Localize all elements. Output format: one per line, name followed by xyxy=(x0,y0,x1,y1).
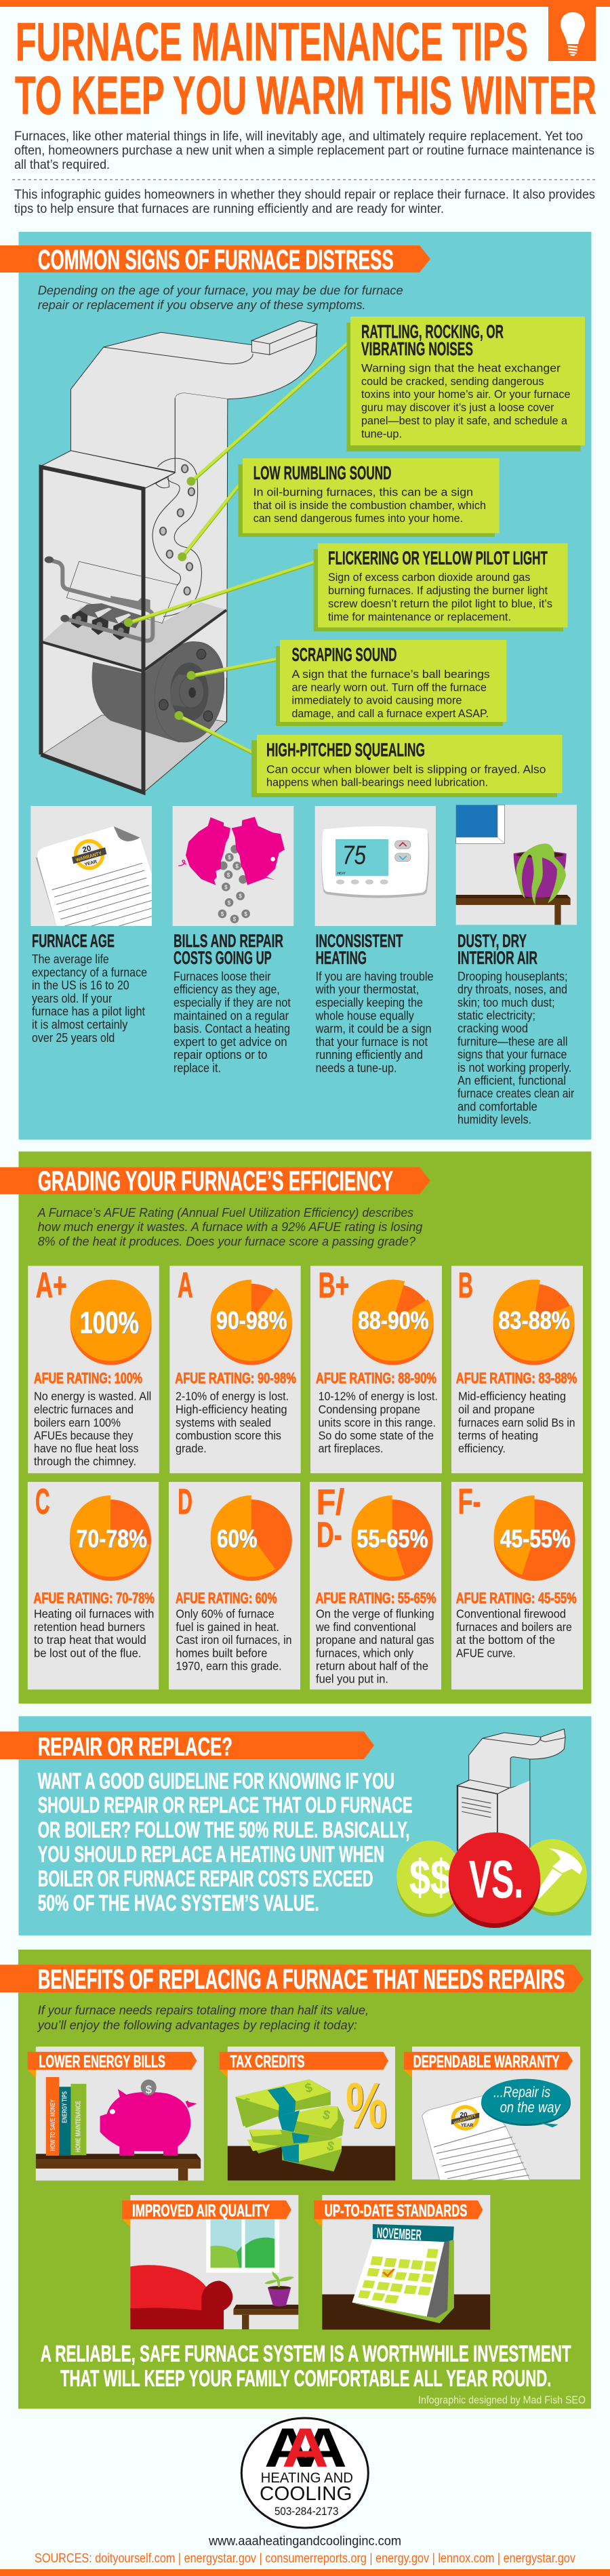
card text: furnace age: it is almost certainly xyxy=(32,1018,127,1032)
illustration: broken piggy bank with coins: $ xyxy=(244,911,247,917)
benefit card: tax credits: % xyxy=(346,2070,387,2142)
card text: bills and repair costs: efficiency as they age, xyxy=(174,983,280,997)
intro italic: grading: 8% of the heat it produces. Does your furnace score a passing grade? xyxy=(38,1234,416,1249)
grade card: C: to trap heat that would xyxy=(34,1633,146,1647)
grade card: C: C xyxy=(35,1482,50,1522)
illustration: thermostat: 75 xyxy=(342,841,366,870)
grade card: B+ xyxy=(310,1266,442,1473)
benefit card: dependable warranty: WARRANTY xyxy=(453,2114,476,2126)
grade card: D: Cast iron oil furnaces, in xyxy=(176,1633,291,1647)
grade card: F-: furnaces and boilers are xyxy=(456,1620,572,1634)
illustration: broken piggy bank with coins: $ xyxy=(228,900,231,906)
grade card: F/D-: On the verge of flunking xyxy=(316,1607,434,1621)
benefit card: tax credits xyxy=(220,2047,395,2181)
card text: inconsistent heating xyxy=(315,931,434,1074)
banner heading: common signs: COMMON SIGNS OF FURNACE DISTRESS xyxy=(38,244,394,275)
top orange bar xyxy=(0,0,610,7)
card text: dusty dry interior air: INTERIOR AIR xyxy=(458,948,537,968)
grade card: A: AFUE RATING: 90-98% xyxy=(175,1370,296,1387)
grade card: F-: 45-55% xyxy=(500,1525,571,1552)
intro text: often, homeowners purchase a new unit when a simple replacement part or routine furnace maintenance is xyxy=(14,144,594,158)
intro italic: benefits: If your furnace needs repairs totaling more than half its value, xyxy=(38,2003,369,2017)
grade card: A+: electric furnaces and xyxy=(34,1403,134,1416)
50% rule text: OR BOILER? FOLLOW THE 50% RULE. BASICALLY, xyxy=(38,1817,409,1842)
grade card: D: 1970, earn this grade. xyxy=(176,1659,282,1672)
mini banner: improved air quality: IMPROVED AIR QUALITY xyxy=(132,2201,270,2220)
intro text: tips to help ensure that furnaces are running efficiently and are ready for winter. xyxy=(14,202,444,216)
callout: rattling noises: tune-up. xyxy=(361,427,402,440)
50% rule text xyxy=(38,1768,412,1915)
card text: inconsistent heating: HEATING xyxy=(316,948,367,968)
callout: high-pitched squealing: happens when ball-bearings need lubrication. xyxy=(266,776,488,789)
grade card: F/D-: AFUE RATING: 55-65% xyxy=(316,1590,436,1607)
card text: furnace age: furnace has a pilot light xyxy=(32,1005,145,1018)
callout: high-pitched squealing: HIGH-PITCHED SQUEALING xyxy=(266,740,425,761)
mini banner: up-to-date standards: UP-TO-DATE STANDARDS xyxy=(325,2201,468,2220)
grade card: B: furnaces earn solid Bs in xyxy=(458,1415,575,1429)
grade card: F-: F- xyxy=(458,1482,481,1522)
50% rule text: SHOULD REPAIR OR REPLACE THAT OLD FURNACE xyxy=(38,1792,412,1817)
callout: flickering pilot light: time for maintenance or replacement. xyxy=(328,610,511,623)
grade card: C: 70-78% xyxy=(76,1525,147,1552)
grade card: F/D-: fuel you put in. xyxy=(316,1672,388,1686)
callout: scraping sound: immediately to avoid causing more xyxy=(291,694,462,706)
card text: inconsistent heating: whole house equally xyxy=(315,1009,414,1022)
callout: flickering pilot light: screw doesn’t return the pilot light to blue, it’s xyxy=(328,597,552,610)
callout: scraping sound: SCRAPING SOUND xyxy=(291,644,397,665)
panel: repair or replace xyxy=(0,1716,591,1935)
logo: AAA heating and cooling: A xyxy=(300,2417,347,2479)
intro italic: benefits: you’ll enjoy the following advantages by replacing it today: xyxy=(37,2017,357,2032)
grade card: B+: art fireplaces. xyxy=(319,1442,383,1455)
grade card: B: efficiency. xyxy=(458,1442,506,1455)
card text: inconsistent heating: If you are having trouble xyxy=(316,969,434,983)
intro italic: common signs xyxy=(38,283,403,312)
intro text: all that’s required. xyxy=(14,158,110,172)
card text: dusty dry interior air: is not working properly. xyxy=(458,1061,571,1074)
card text: dusty dry interior air: and comfortable xyxy=(458,1100,537,1113)
banner heading: common signs xyxy=(0,244,430,275)
grade card: B+: AFUE RATING: 88-90% xyxy=(316,1370,436,1387)
grade card: D: fuel is gained in heat. xyxy=(176,1620,279,1634)
benefit card: dependable warranty: ...Repair is xyxy=(493,2083,550,2100)
50% rule text: YOU SHOULD REPLACE A HEATING UNIT WHEN xyxy=(38,1841,384,1866)
intro italic: common signs: Depending on the age of your furnace, you may be due for furnace xyxy=(38,283,403,297)
mini banner: lower energy bills xyxy=(28,2052,197,2078)
grade card: A: High-efficiency heating xyxy=(176,1403,287,1416)
benefit card: dependable warranty xyxy=(404,2047,580,2183)
card text: dusty dry interior air: furniture—these are all xyxy=(458,1034,568,1048)
grade card: B+: units score in this range. xyxy=(319,1415,436,1429)
grade card: B: terms of heating xyxy=(458,1428,538,1442)
illustration: broken piggy bank with coins: $ xyxy=(224,884,228,890)
intro text xyxy=(12,129,596,216)
grade card: B+: Condensing propane xyxy=(319,1403,420,1416)
grade card: F/D-: D- xyxy=(317,1515,342,1555)
callout: rattling noises: toxins into your home’s air. Or your furnace xyxy=(361,388,571,401)
callout: rattling noises: Warning sign that the heat exchanger xyxy=(361,362,561,374)
logo: AAA heating and cooling: A xyxy=(282,2417,329,2479)
furnace illustration xyxy=(41,321,317,793)
benefit card: lower energy bills: $ xyxy=(146,2083,152,2096)
benefit card: lower energy bills: ENERGY TIPS xyxy=(61,2091,69,2123)
card text: bills and repair costs: COSTS GOING UP xyxy=(174,948,272,968)
mini banner: improved air quality xyxy=(122,2200,291,2227)
grade card: C: AFUE RATING: 70-78% xyxy=(33,1590,155,1607)
grade card: A+: boilers earn 100% xyxy=(34,1415,121,1429)
grade card: D xyxy=(169,1482,300,1689)
benefit card: improved air quality xyxy=(122,2195,298,2329)
mini banner: tax credits: TAX CREDITS xyxy=(230,2052,305,2071)
card text: dusty dry interior air: static electricity; xyxy=(458,1009,535,1022)
intro italic: grading: A Furnace’s AFUE Rating (Annual Fuel Utilization Efficiency) describes xyxy=(37,1205,413,1220)
callout: rattling noises: VIBRATING NOISES xyxy=(361,338,473,359)
grade card: A xyxy=(169,1266,301,1473)
card text: bills and repair costs xyxy=(174,931,291,1074)
card text: inconsistent heating: running efficiently and xyxy=(316,1048,423,1062)
grade card: B: B xyxy=(458,1266,473,1306)
callout: rattling noises: panel—best to play it safe, and schedule a xyxy=(361,414,568,427)
grade card: C: Heating oil furnaces with xyxy=(34,1607,154,1621)
grade card: B+: 10-12% of energy is lost. xyxy=(319,1390,438,1403)
intro italic: grading: how much energy it wastes. A furnace with a 92% AFUE rating is losing xyxy=(38,1220,423,1234)
mini banner: lower energy bills: LOWER ENERGY BILLS xyxy=(39,2052,165,2071)
grade card: F/D- xyxy=(310,1482,441,1689)
50% rule text: BOILER OR FURNACE REPAIR COSTS EXCEED xyxy=(38,1866,373,1891)
grade card: C xyxy=(28,1482,159,1689)
callout: high-pitched squealing xyxy=(251,735,563,797)
card text: dusty dry interior air: humidity levels. xyxy=(458,1113,531,1127)
illustration: broken piggy bank with coins: $ xyxy=(227,872,230,878)
card text: dusty dry interior air: dry throats, noses, and xyxy=(458,983,567,997)
grade card: A: A xyxy=(178,1266,193,1306)
callout: scraping sound: A sign that the furnace’s ball bearings xyxy=(291,668,490,681)
grade card: B+: 88-90% xyxy=(358,1307,429,1335)
illustration: warranty document: YEAR xyxy=(84,860,98,867)
panel: grading your furnace's efficiency xyxy=(0,1152,591,1704)
callout: low rumbling sound xyxy=(239,458,499,537)
benefit card: lower energy bills xyxy=(28,2047,204,2181)
card text: bills and repair costs: basis. Contact a heating xyxy=(174,1022,290,1036)
card text: bills and repair costs: replace it. xyxy=(174,1061,221,1074)
grade card: F/D-: furnaces, which only xyxy=(316,1646,413,1659)
grade card: C: retention head burners xyxy=(34,1620,145,1634)
grade card: F- xyxy=(451,1482,583,1689)
card text: inconsistent heating: with your thermostat, xyxy=(315,983,419,997)
grade card: A+: AFUEs because they xyxy=(34,1428,134,1442)
card text: dusty dry interior air: An efficient, functional xyxy=(458,1074,566,1087)
benefit card: tax credits: $ xyxy=(325,2139,336,2154)
grade card: F/D-: return about half of the xyxy=(316,1659,428,1672)
icon: hammer xyxy=(536,1849,582,1899)
card text: bills and repair costs: expert to get advice on xyxy=(174,1035,287,1049)
benefit card: up-to-date standards xyxy=(314,2195,490,2330)
callout: rattling noises: guru may discover it’s just a loose cover xyxy=(361,401,554,414)
grade card: F/D-: propane and natural gas xyxy=(316,1633,434,1647)
intro italic: common signs: repair or replacement if you observe any of these symptoms. xyxy=(38,298,366,312)
leader lines and dots xyxy=(124,340,350,755)
grade card: D: AFUE RATING: 60% xyxy=(176,1590,277,1607)
intro text: Furnaces, like other material things in life, will inevitably age, and ultimately require replacement. Yet too xyxy=(14,129,583,144)
grade card: A: combustion score this xyxy=(176,1428,281,1442)
illustration: warranty document xyxy=(30,806,152,926)
illustration: thermostat: HEAT xyxy=(338,871,346,874)
card text: dusty dry interior air xyxy=(458,931,574,1127)
illustration: warranty document: WARRANTY xyxy=(75,851,102,863)
grade card: F/D-: F/ xyxy=(317,1483,344,1523)
card text: inconsistent heating: that your furnace is not xyxy=(316,1035,428,1049)
grade card: C: be lost out of the flue. xyxy=(34,1646,141,1659)
benefit card: up-to-date standards: NOVEMBER xyxy=(376,2224,422,2243)
banner heading: grading xyxy=(0,1165,430,1196)
website: www.aaaheatingandcoolinginc.com xyxy=(208,2535,401,2549)
benefit card: dependable warranty: on the way xyxy=(500,2099,561,2116)
grade card: A: systems with sealed xyxy=(176,1415,271,1429)
logo: AAA heating and cooling: COOLING xyxy=(260,2483,352,2505)
grade card: B: oil and propane xyxy=(458,1403,535,1416)
callout: low rumbling sound: In oil-burning furnaces, this can be a sign xyxy=(253,486,473,499)
grade card: F-: AFUE curve. xyxy=(456,1646,516,1659)
mini banner: dependable warranty xyxy=(404,2052,573,2078)
card text: furnace age: over 25 years old xyxy=(32,1031,115,1045)
callout: flickering pilot light: burning furnaces. If adjusting the burner light xyxy=(328,584,548,597)
illustration: warranty document: 20 xyxy=(82,845,92,855)
callout: high-pitched squealing: Can occur when blower belt is slipping or frayed. Also xyxy=(266,763,546,776)
illustration: broken piggy bank with coins: $ xyxy=(239,893,242,900)
callout: scraping sound xyxy=(276,640,506,726)
card text: bills and repair costs: BILLS AND REPAIR xyxy=(174,931,283,951)
benefit card: dependable warranty: 20 xyxy=(460,2112,468,2119)
card text: bills and repair costs: maintained on a regular xyxy=(174,1009,289,1022)
card text: bills and repair costs: Furnaces loose their xyxy=(174,969,271,983)
intro italic: grading xyxy=(37,1205,423,1249)
designer credit: Infographic designed by Mad Fish SEO xyxy=(418,2395,586,2407)
illustration: broken piggy bank with coins: $ xyxy=(221,911,224,917)
grade card: A+: have no flue heat loss xyxy=(34,1442,139,1455)
illustration: broken piggy bank with coins: $ xyxy=(233,917,237,923)
grade card: A: 2-10% of energy is lost. xyxy=(176,1390,289,1403)
card text: furnace age: The average life xyxy=(32,952,109,966)
grade card: A: grade. xyxy=(176,1442,207,1455)
grade card: F-: Conventional firewood xyxy=(456,1607,566,1621)
grade card: A: 90-98% xyxy=(216,1307,287,1335)
card text: bills and repair costs: especially if they are not xyxy=(174,996,291,1009)
card text: dusty dry interior air: cracking wood xyxy=(458,1022,528,1035)
callout: low rumbling sound: can send dangerous fumes into your home. xyxy=(253,512,463,525)
mini banner: tax credits xyxy=(220,2052,388,2078)
grade card: D: Only 60% of furnace xyxy=(176,1607,274,1621)
grade card: A+ xyxy=(28,1266,159,1473)
logo: AAA heating and cooling: A xyxy=(264,2417,311,2479)
card text: furnace age: FURNACE AGE xyxy=(32,931,115,951)
card text: dusty dry interior air: furnace creates clean air xyxy=(458,1087,574,1100)
benefit card: lower energy bills: HOW TO SAVE MONEY xyxy=(49,2099,57,2151)
grade card: B: 83-88% xyxy=(498,1307,570,1335)
illustration: broken piggy bank with coins: $ xyxy=(235,863,239,869)
grade card: A+: 100% xyxy=(80,1306,139,1340)
illustration: drooping houseplant xyxy=(456,805,577,925)
grade card: A+: AFUE RATING: 100% xyxy=(34,1370,142,1387)
grade card: B xyxy=(451,1266,583,1473)
icon: repair vs replace badges: $$ xyxy=(409,1851,451,1905)
grade card: D: D xyxy=(178,1482,192,1522)
card text: dusty dry interior air: DUSTY, DRY xyxy=(458,931,527,951)
card text: furnace age xyxy=(32,931,147,1045)
grade card: F-: at the bottom of the xyxy=(456,1633,555,1647)
illustration: thermostat xyxy=(315,806,436,926)
grade card: B: Mid-efficiency heating xyxy=(458,1390,566,1403)
grade card: F/D-: 55-65% xyxy=(357,1525,428,1552)
callout: flickering pilot light xyxy=(314,544,568,631)
grade card: D: homes built before xyxy=(176,1646,267,1659)
logo: AAA heating and cooling: 503-284-2173 xyxy=(274,2505,338,2518)
benefit card: lower energy bills: HOME MAINTENANCE xyxy=(75,2101,83,2152)
card text: dusty dry interior air: skin; too much dust; xyxy=(458,996,555,1009)
50% rule text: WANT A GOOD GUIDELINE FOR KNOWING IF YOU xyxy=(38,1768,394,1793)
50% rule text: 50% OF THE HVAC SYSTEM’S VALUE. xyxy=(38,1890,319,1915)
card text: furnace age: expectancy of a furnace xyxy=(32,966,147,980)
panel: benefits of replacing xyxy=(0,1950,591,2409)
logo: AAA heating and cooling: HEATING AND xyxy=(261,2470,353,2486)
benefit card: dependable warranty: YEAR xyxy=(461,2123,473,2128)
card text: furnace age: years old. If your xyxy=(32,992,112,1005)
card text: furnace age: in the US is 16 to 20 xyxy=(32,979,129,992)
callout: low rumbling sound: that oil is inside the combustion chamber, which xyxy=(253,499,486,512)
illustration: small furnace xyxy=(457,1729,565,1851)
card text: dusty dry interior air: signs that your furnace xyxy=(458,1048,567,1062)
callout: low rumbling sound: LOW RUMBLING SOUND xyxy=(253,462,392,483)
grade card: A+: No energy is wasted. All xyxy=(34,1390,151,1403)
intro text: This infographic guides homeowners in whether they should repair or replace their furnace. It also provides xyxy=(14,188,595,202)
card text: inconsistent heating: warm, it could be a sign xyxy=(315,1022,432,1036)
callout: rattling noises: RATTLING, ROCKING, OR xyxy=(361,321,504,342)
logo: AAA heating and cooling xyxy=(241,2417,368,2528)
icon: light bulb xyxy=(548,3,596,61)
card text: inconsistent heating: especially keeping the xyxy=(316,996,423,1009)
closing statement xyxy=(41,2341,571,2392)
callout: flickering pilot light: Sign of excess carbon dioxide around gas xyxy=(328,571,530,584)
illustration: broken piggy bank with coins: $ xyxy=(228,855,231,861)
callout: rattling noises: could be cracked, sending dangerous xyxy=(361,375,544,388)
grade card: A+: through the chimney. xyxy=(34,1454,136,1468)
mini banner: up-to-date standards xyxy=(314,2200,483,2227)
banner heading: grading: GRADING YOUR FURNACE’S EFFICIENCY xyxy=(38,1165,393,1196)
callout: scraping sound: damage, and call a furnace expert ASAP. xyxy=(291,707,489,720)
benefit card: tax credits: $ xyxy=(243,2095,253,2111)
icon: repair vs replace badges xyxy=(396,1832,587,1928)
card text: bills and repair costs: repair options or to xyxy=(174,1048,267,1062)
title xyxy=(15,12,596,125)
banner heading: repair or replace: REPAIR OR REPLACE? xyxy=(38,1733,232,1761)
grade card: B+: B+ xyxy=(319,1266,349,1306)
grade card: F/D-: we find conventional xyxy=(315,1620,416,1634)
intro italic: benefits xyxy=(37,2003,369,2032)
icon: repair vs replace badges: VS. xyxy=(469,1849,523,1909)
grade card: A+: A+ xyxy=(36,1266,67,1306)
bottom orange bar xyxy=(0,2569,610,2576)
benefit card: tax credits: $ xyxy=(321,2108,332,2123)
card text: dusty dry interior air: Drooping houseplants; xyxy=(458,969,568,983)
callout: rattling noises xyxy=(347,317,585,451)
grade card: D: 60% xyxy=(217,1525,258,1552)
grade card: B+: So do some state of the xyxy=(319,1428,434,1442)
illustration: broken piggy bank with coins xyxy=(173,806,293,926)
panel: common signs of furnace distress xyxy=(0,232,591,1140)
card text: inconsistent heating: INCONSISTENT xyxy=(316,931,403,951)
benefit card: tax credits: $ xyxy=(304,2080,314,2096)
callout: scraping sound: are nearly worn out. Turn off the furnace xyxy=(291,681,487,694)
card text: inconsistent heating: needs a tune-up. xyxy=(316,1061,397,1074)
